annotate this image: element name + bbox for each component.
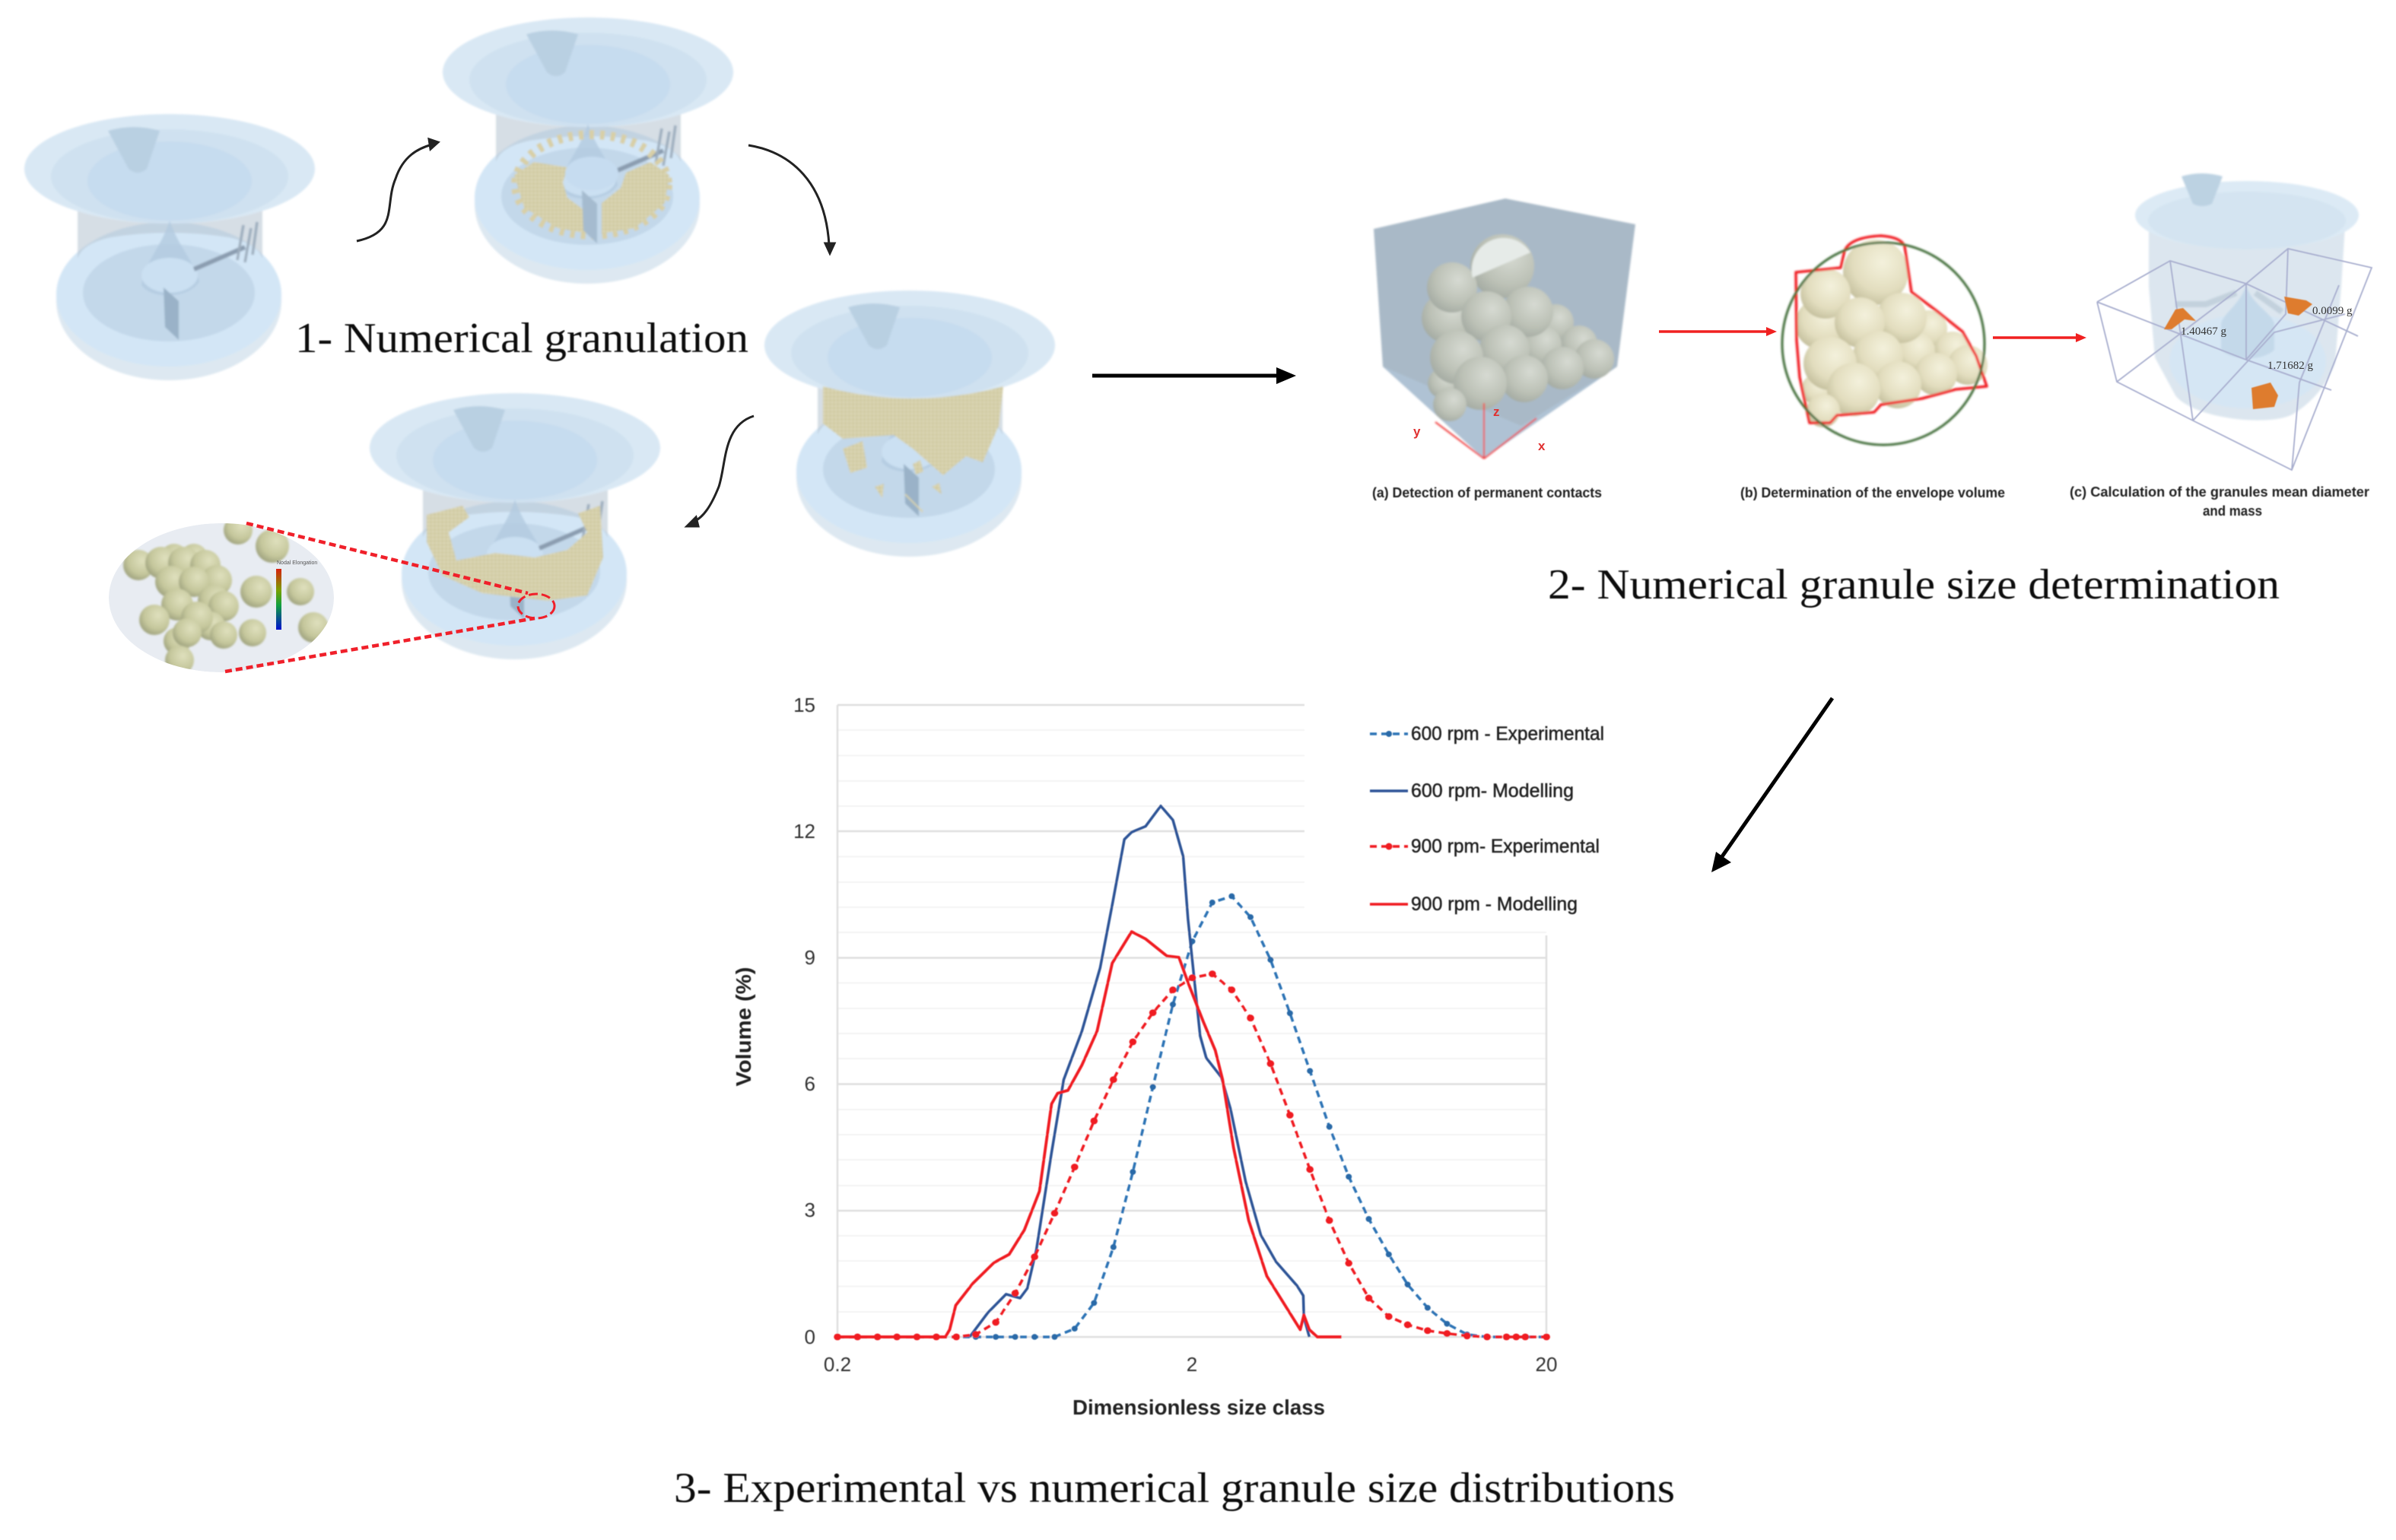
series: 900 rpm modelling [837, 932, 1342, 1337]
legend: 900 rpm experimental: 900 rpm- Experimental [1411, 836, 1600, 857]
arrow: vessel 3 to vessel 4 [687, 416, 754, 526]
caption b: (b) Determination of the envelope volume [1740, 485, 2005, 500]
x axis ticks: 2 [1187, 1353, 1197, 1376]
x axis ticks: 0.2 [824, 1353, 851, 1376]
heading 2: 2- Numerical granule size determination [1548, 561, 2280, 608]
vessel 2: granules settled in bowl [443, 17, 733, 284]
inset: zoom on granule spheres [109, 516, 334, 675]
axis title: size class: Dimensionless size class [1072, 1396, 1325, 1419]
caption c: (c) Calculation of the granules mean diameter [2070, 484, 2369, 500]
y axis ticks: 15 [793, 694, 815, 716]
y axis ticks: 6 [805, 1072, 815, 1095]
legend: 900 rpm modelling: 900 rpm - Modelling [1411, 894, 1578, 915]
(a) bounding box with particles [1374, 198, 1635, 459]
axis title: volume: Volume (%) [732, 967, 755, 1086]
panel: granule size determination [1372, 173, 2372, 608]
panel: numerical granulation [24, 17, 1055, 675]
y axis ticks: 0 [805, 1326, 815, 1348]
chart: granule size distributions [732, 694, 1604, 1419]
series: 600 rpm modelling [970, 806, 1309, 1337]
(c) vessel with granules and bounding boxes: 1.40467 g [2181, 325, 2227, 338]
x axis ticks: 20 [1536, 1353, 1557, 1376]
vessel 1: empty granulator [24, 114, 315, 380]
heading 1: 1- Numerical granulation [295, 315, 748, 362]
y axis ticks: 3 [805, 1199, 815, 1221]
x axis ticks [824, 1353, 1557, 1376]
(c) vessel with granules and bounding boxes: 0.0099 g [2312, 305, 2353, 317]
axis letters: y [1413, 424, 1421, 439]
arrow: step 1 to step 2 [1092, 367, 1296, 384]
series: 900 rpm experimental [834, 970, 1550, 1340]
legend: 600 rpm experimental: 600 rpm - Experimental [1411, 723, 1604, 745]
vessel 4: granules in rope flow [370, 393, 660, 659]
legend: 600 rpm modelling: 600 rpm- Modelling [1411, 780, 1574, 802]
arrow b to c [1993, 333, 2086, 342]
inset: zoom on granule spheres: Nodal Elongation [277, 560, 317, 566]
grid lines [837, 730, 1546, 1312]
axis letters: z [1493, 405, 1500, 419]
y axis ticks: 9 [805, 946, 815, 969]
caption a: (a) Detection of permanent contacts [1372, 485, 1602, 500]
(c) vessel with granules and bounding boxes: 1.71682 g [2267, 360, 2314, 372]
zoom lines and circled region [225, 523, 555, 672]
axis letters: x [1538, 439, 1546, 453]
legend [1370, 723, 1604, 915]
y axis ticks [793, 694, 815, 1348]
caption c: and mass [2203, 503, 2262, 519]
series: 600 rpm experimental [837, 894, 1546, 1340]
caption c [2070, 484, 2369, 519]
axis letters [1413, 405, 1546, 453]
arrow: vessel 1 to vessel 2 [357, 139, 438, 241]
y axis ticks: 12 [793, 820, 815, 843]
arrow: vessel 2 to vessel 3 [748, 145, 834, 253]
heading 3: 3- Experimental vs numerical granule size distributions [674, 1465, 1675, 1512]
arrow: step 2 to step 3 [1711, 698, 1832, 872]
(c) vessel with granules and bounding boxes [2097, 173, 2372, 470]
(b) envelope volume [1782, 236, 1988, 445]
vessel 3: granules on the wall [764, 291, 1055, 557]
arrow a to b [1659, 327, 1777, 336]
